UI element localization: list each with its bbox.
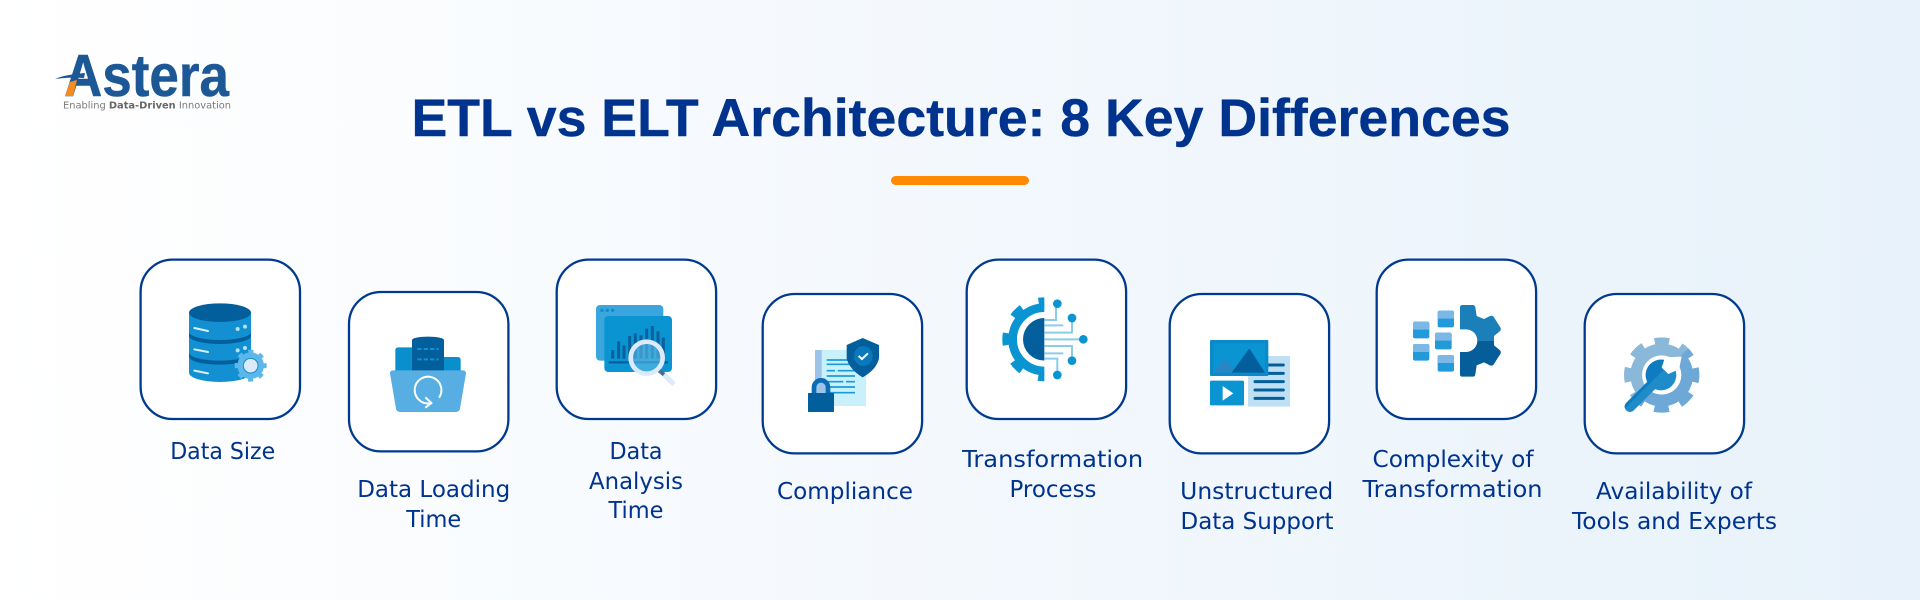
label: Complexity of Transformation: Transformation <box>1361 477 1542 503</box>
item: Complexity of Transformation <box>1361 260 1542 503</box>
icon: document, shield and lock <box>808 338 879 412</box>
label: Complexity of Transformation: Complexity of <box>1372 447 1534 473</box>
label: Compliance: Compliance <box>777 479 913 505</box>
item: Data Analysis Time <box>557 260 716 524</box>
label: Transformation Process: Process <box>1010 477 1096 503</box>
label: Availability of Tools and Experts <box>1571 479 1777 535</box>
card: Transformation Process <box>967 260 1126 419</box>
label: Unstructured Data Support: Unstructured <box>1180 479 1333 505</box>
card: Data Size <box>141 260 300 419</box>
item: Transformation Process <box>961 260 1143 503</box>
icon: half gear with circuit <box>1007 299 1088 379</box>
icon: gear with wrench <box>1627 341 1696 409</box>
label: Unstructured Data Support: Data Support <box>1180 509 1334 535</box>
logo: Astera: Enabling Data-Driven Innovation <box>63 100 231 112</box>
item: Data Size <box>141 260 300 465</box>
label: Complexity of Transformation <box>1361 447 1542 503</box>
label: Transformation Process <box>961 447 1143 503</box>
card: Complexity of Transformation <box>1377 260 1536 419</box>
label: Data Analysis Time: Data <box>610 439 662 465</box>
title underline accent <box>891 176 1029 185</box>
label: Availability of Tools and Experts: Availability of <box>1596 479 1753 505</box>
label: Data Analysis Time: Analysis <box>589 469 683 495</box>
icon: data blocks and half gear <box>1413 305 1501 377</box>
card: Unstructured Data Support <box>1170 294 1329 453</box>
title: ETL vs ELT Architecture: 8 Key Differences <box>412 89 1510 148</box>
card: Availability of Tools and Experts <box>1585 294 1744 453</box>
logo: Astera: Astera <box>64 43 230 109</box>
label: Availability of Tools and Experts: Tools and Experts <box>1571 509 1777 535</box>
label: Data Analysis Time <box>589 439 683 524</box>
icon: chart windows with magnifier <box>596 305 674 384</box>
icon: folder with refresh <box>390 337 466 412</box>
label: Data Size: Data Size <box>170 439 275 465</box>
label: Data Loading Time: Time <box>405 507 461 533</box>
item: Compliance <box>763 294 922 505</box>
icon: database with gear <box>189 303 265 382</box>
item: Unstructured Data Support <box>1170 294 1334 535</box>
card: Data Loading Time <box>349 292 508 451</box>
item: Data Loading Time <box>349 292 510 533</box>
card: Compliance <box>763 294 922 453</box>
label: Data Analysis Time: Time <box>608 498 664 524</box>
label: Data Loading Time <box>357 477 510 533</box>
label: Unstructured Data Support <box>1180 479 1334 535</box>
label: Transformation Process: Transformation <box>961 447 1143 473</box>
item: Availability of Tools and Experts <box>1571 294 1777 535</box>
icon: image, video and document <box>1210 340 1290 407</box>
card: Data Analysis Time <box>557 260 716 419</box>
label: Data Loading Time: Data Loading <box>357 477 510 503</box>
